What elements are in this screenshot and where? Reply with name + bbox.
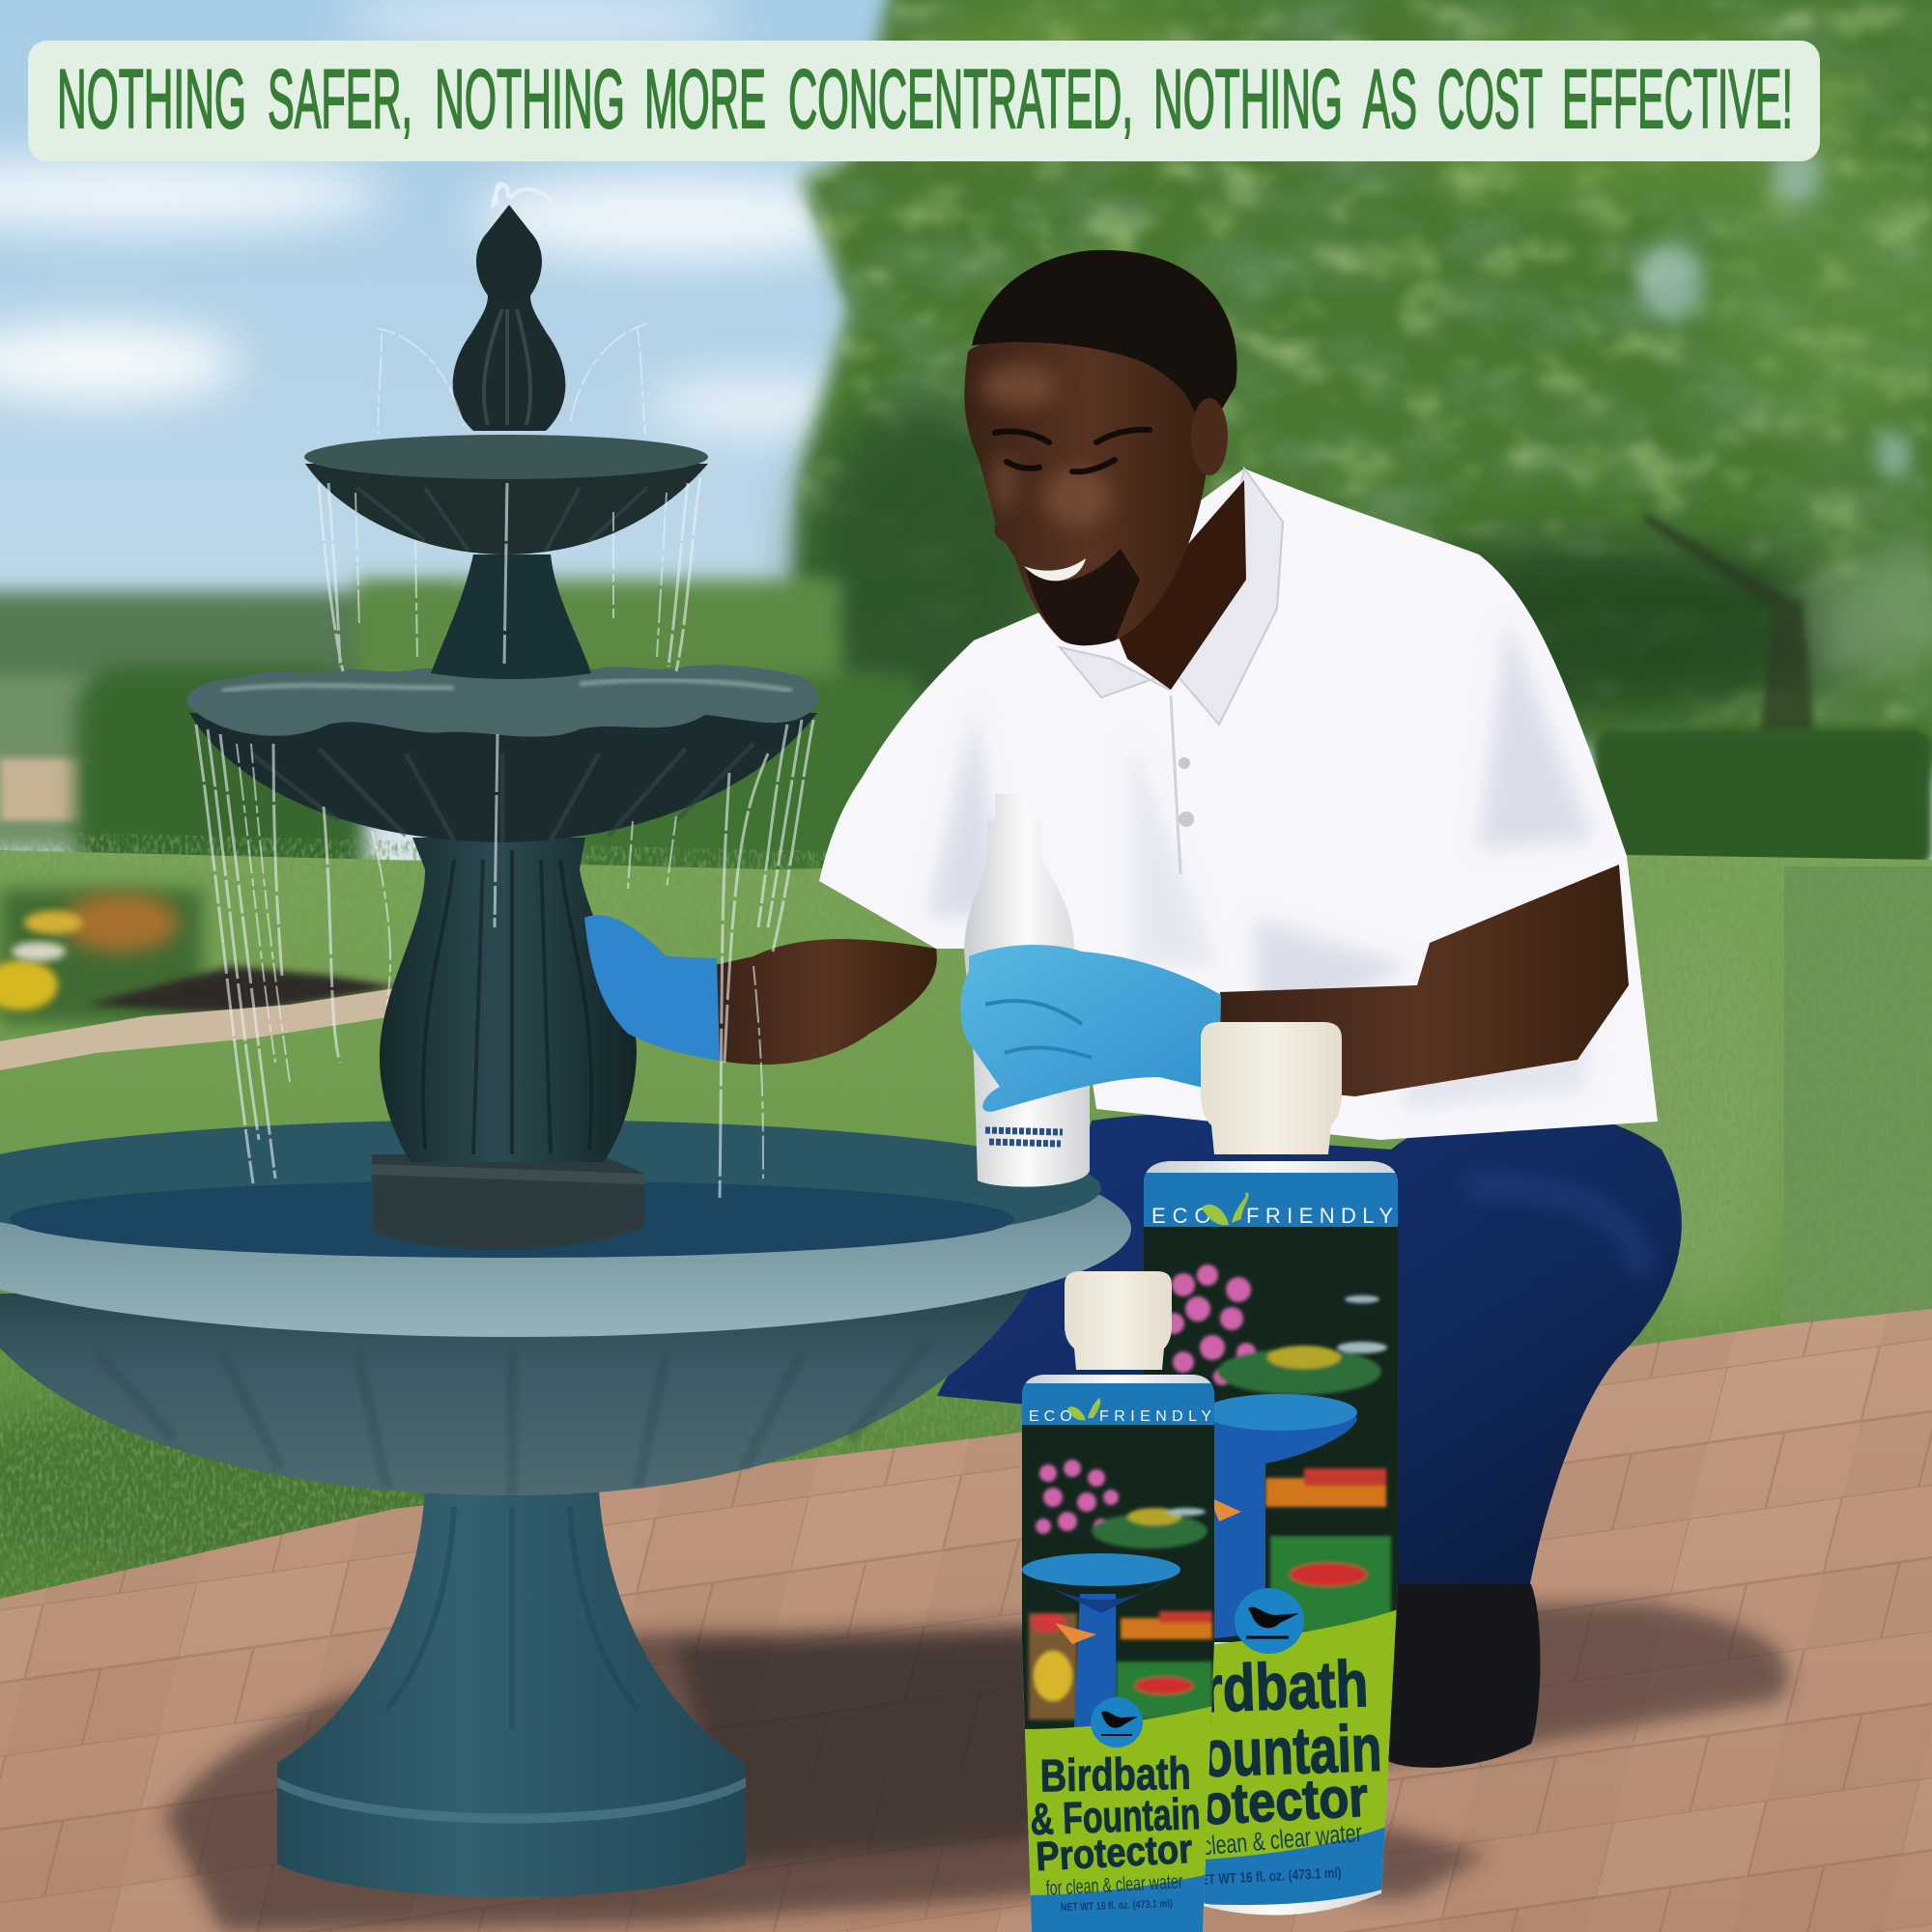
shirt: placket and buttons (1171, 696, 1194, 874)
man: trousers (937, 1110, 1682, 1594)
trees: trunk (1642, 512, 1814, 734)
label: eco friendly: ECO (1029, 1408, 1077, 1425)
banner headline (57, 53, 1793, 146)
label: top band (1140, 1173, 1401, 1229)
fountain: upper tiers (187, 205, 818, 1250)
label: bottom band (1204, 1827, 1385, 1905)
banner headline: CONCENTRATED, (788, 53, 1133, 146)
banner headline: NOTHING (57, 53, 246, 146)
label: blue birdbath (1074, 1594, 1116, 1729)
ground shadows (164, 1604, 1789, 1932)
vase column (380, 838, 637, 1162)
head: brows and lowered eyelids (995, 430, 1150, 471)
paving (0, 1309, 1932, 1932)
small product bottle: NET WT 16 fl. oz. (473.1 ml) (1061, 1898, 1173, 1914)
banner headline: NOTHING (435, 53, 625, 146)
lawn: grass colour variation (0, 918, 1787, 1575)
small product bottle (1019, 1271, 1217, 1932)
middle bowl (189, 713, 817, 842)
small product bottle: Protector (1035, 1826, 1193, 1879)
trees: sky gaps (1638, 145, 1909, 477)
label: leaf logo (1067, 1398, 1100, 1420)
water: top jet (493, 184, 555, 208)
head: hair (972, 250, 1237, 425)
held bottle label text marks (985, 1130, 1063, 1144)
man: head (964, 250, 1237, 645)
fountain: lower basin bowl and pedestal (0, 1120, 1131, 1897)
head: cheek highlight (980, 365, 1111, 526)
label: orange lily (1055, 1623, 1096, 1644)
small product bottle: & Fountain (1030, 1788, 1201, 1844)
man: forearm reaching to fountain (710, 939, 937, 1065)
label: bottom band (1022, 1872, 1217, 1932)
banner (28, 41, 1820, 161)
banner headline: COST (1437, 53, 1543, 146)
man: right glove holding bottle (960, 945, 1221, 1112)
banner headline: SAFER, (268, 53, 412, 146)
held white bottle (964, 794, 1090, 1187)
label: leaf logo (1202, 1193, 1249, 1225)
label: bird badge (1091, 1697, 1143, 1747)
rim (0, 1121, 1131, 1337)
body (1022, 1375, 1214, 1932)
trees: leaf texture (796, 0, 1932, 728)
man: left glove on column (584, 915, 720, 1061)
finial (453, 205, 565, 431)
label: blue birdbath (1214, 1416, 1357, 1638)
lawn: grass texture (0, 831, 1800, 1599)
small product bottle: for clean & clear water (1045, 1870, 1183, 1900)
label: photo (1022, 1425, 1215, 1734)
large product bottle: otector (1200, 1766, 1370, 1836)
paving: brick joints (0, 1309, 1932, 1932)
label: bird badge (1235, 1588, 1304, 1654)
water streams (196, 184, 813, 1198)
small product bottle: FRIENDLY (1099, 1408, 1211, 1425)
label: green panel (1206, 1609, 1397, 1860)
head: face (964, 337, 1209, 645)
label: eco friendly: ECO (1151, 1204, 1218, 1228)
label: top band (1019, 1383, 1217, 1426)
pedestal (277, 1488, 746, 1897)
head: ear (1191, 398, 1228, 475)
man: right arm (1220, 865, 1629, 1096)
man: white polo shirt (819, 469, 1658, 1140)
label: heading text: Birdbath (1039, 1747, 1191, 1801)
large product bottle: clean & clear water (1201, 1818, 1363, 1861)
banner headline: AS (1363, 53, 1417, 146)
body (1144, 1161, 1398, 1915)
large product bottle (1140, 1022, 1401, 1915)
head: beard (1026, 549, 1140, 645)
label: heading text: rdbath (1201, 1647, 1369, 1726)
lawn: right patch (1784, 867, 1932, 1328)
cap (1065, 1271, 1172, 1370)
inner basin (0, 1120, 1101, 1257)
flower bed (0, 889, 406, 1070)
label: orange lily (1214, 1499, 1241, 1521)
banner headline: MORE (644, 53, 766, 146)
head: smile (1024, 558, 1086, 581)
bowl (0, 1275, 1038, 1495)
top bowl rim (304, 435, 708, 479)
cap (1201, 1022, 1342, 1154)
large product bottle: ET WT 16 fl. oz. (473.1 ml) (1200, 1864, 1342, 1889)
shirt: collar (1060, 469, 1283, 724)
stem (431, 554, 591, 679)
background: distant trees and hedges (0, 580, 1932, 908)
large product bottle: FRIENDLY (1246, 1204, 1393, 1228)
trees: canopy light and shade (802, 10, 1932, 724)
base block (372, 1154, 645, 1250)
large product bottle: ountain (1201, 1712, 1382, 1791)
label: green panel (1022, 1705, 1217, 1898)
man: neck (1115, 480, 1246, 690)
background: sky with clouds (0, 0, 1932, 869)
middle bowl rim (187, 665, 818, 737)
lawn (0, 850, 1932, 1604)
background: trees (763, 0, 1932, 783)
banner headline: NOTHING (1153, 53, 1343, 146)
top bowl (305, 464, 708, 554)
label: photo (1143, 1227, 1399, 1642)
man: shoe (1383, 1584, 1540, 1768)
